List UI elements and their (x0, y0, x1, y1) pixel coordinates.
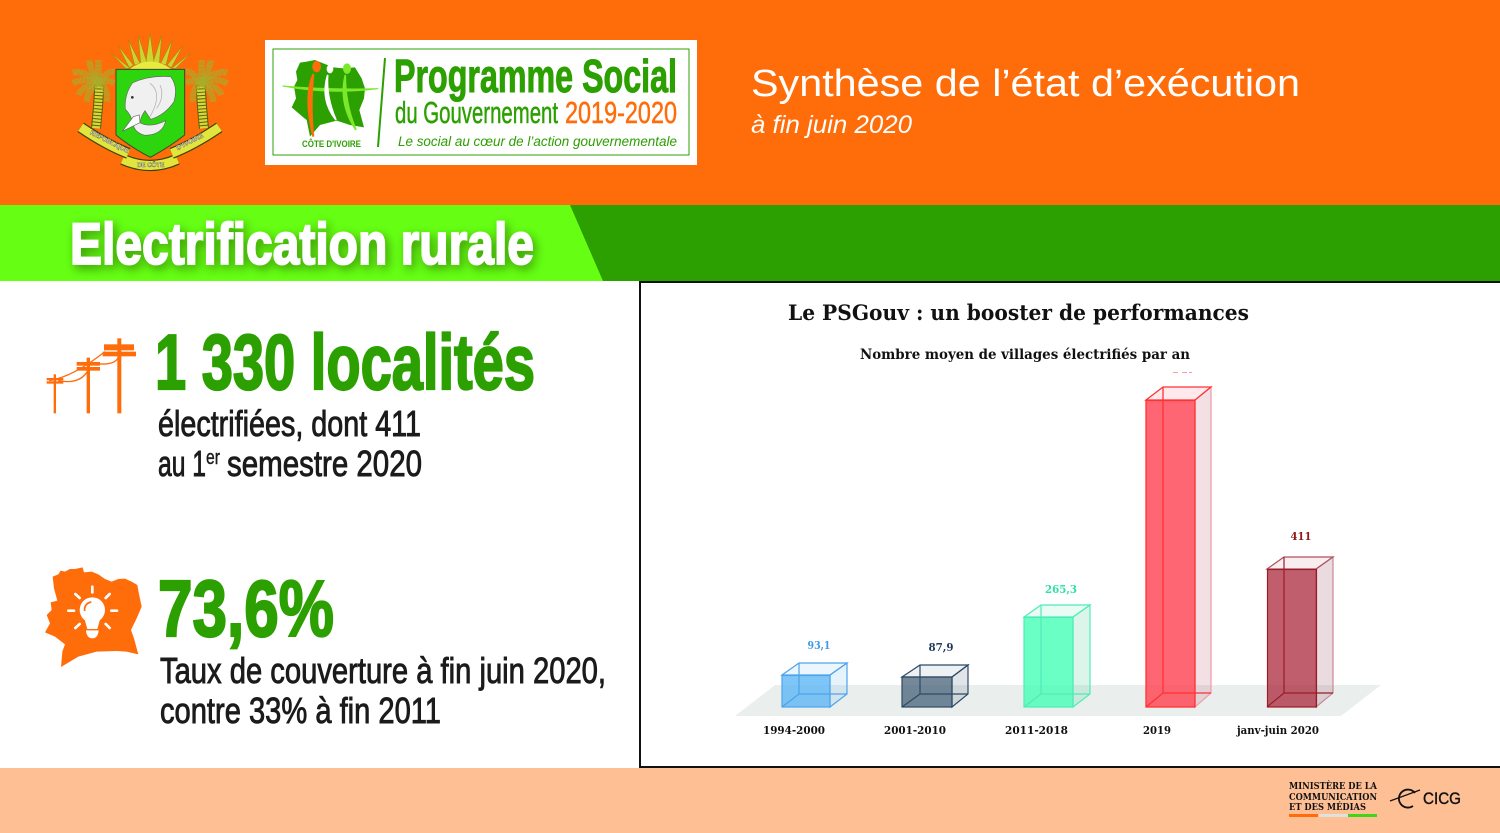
header subtitle: à fin juin 2020 (751, 111, 912, 139)
bar: 2019 (1146, 372, 1211, 707)
icon: map with light bulb (45, 567, 142, 667)
category labels: 2011-2018 (1005, 724, 1068, 737)
text: coverage detail line 2: contre 33% à fin 2011 (160, 690, 441, 731)
value: 93,1: 93,1 (808, 639, 830, 652)
header title: Synthèse de l’état d’exécution (751, 63, 1300, 105)
header band (0, 0, 1500, 205)
text: first semester: au 1 (158, 443, 206, 484)
ribbon inscriptions: D'IVOIRE (175, 132, 205, 152)
bar: janv-juin 2020 (1267, 530, 1333, 707)
CICG wordmark: CICG (1423, 789, 1461, 808)
flag stripe (1289, 814, 1377, 817)
text: first semester: semestre 2020 (227, 443, 422, 484)
ministry name: COMMUNICATION (1289, 792, 1377, 803)
icon: coat of arms (73, 33, 227, 169)
value: clipped label (1173, 372, 1192, 374)
panel: key figures (45, 318, 606, 731)
logo subtitle: du Gouvernement (395, 95, 558, 130)
logo caption: CÔTE D'IVOIRE (302, 138, 361, 149)
icon: logo map with figures (283, 60, 378, 137)
chart floor (735, 685, 1381, 716)
text: first semester (158, 443, 422, 484)
ribbon inscriptions (89, 128, 205, 169)
logo title: Programme Social (394, 50, 677, 102)
icon: shield (116, 69, 185, 157)
category labels (763, 724, 1319, 737)
icon: sun rays (111, 33, 191, 69)
category labels: 2001-2010 (884, 724, 946, 737)
stat: coverage rate: 73,6% (158, 564, 334, 653)
section title: Electrification rurale (70, 212, 534, 277)
bar: 1994-2000 (782, 639, 847, 707)
text: coverage detail line 1: Taux de couverture à fin juin 2020, (160, 650, 606, 691)
section banner (0, 205, 1500, 281)
category labels: janv-juin 2020 (1236, 724, 1319, 737)
chart subtitle: Nombre moyen de villages électrifiés par an (860, 347, 1190, 363)
ribbon inscriptions: DE CÔTE (137, 160, 165, 169)
ribbon inscriptions: RÉPUBLIQUE (89, 128, 131, 155)
logo tagline: Le social au cœur de l’action gouvernementale (398, 134, 677, 149)
icon: CICG logo mark (1390, 790, 1420, 808)
chart title: Le PSGouv : un booster de performances (788, 300, 1249, 325)
stat: localities: 1 330 localités (155, 318, 535, 406)
icon: elephant (122, 76, 176, 135)
ministry name: ET DES MÉDIAS (1289, 801, 1366, 813)
footer band (0, 768, 1500, 833)
text: localities detail: électrifiées, dont 411 (158, 403, 421, 444)
value: 265,3: 265,3 (1045, 583, 1077, 596)
value: 411: 411 (1290, 530, 1312, 543)
category labels: 1994-2000 (763, 724, 825, 737)
icon: ribbon (81, 127, 219, 165)
ministry name: MINISTÈRE DE LA (1289, 780, 1378, 792)
icon: power lines (47, 338, 136, 413)
logo divider (378, 58, 385, 147)
bar: 2001-2010 (902, 641, 968, 707)
text: first semester: er (206, 447, 220, 469)
value: 87,9: 87,9 (928, 641, 954, 654)
logo box (265, 40, 697, 165)
logo years: 2019-2020 (565, 95, 677, 130)
icon: left palm (73, 60, 114, 128)
icon: right palm (186, 60, 227, 128)
category labels: 2019 (1143, 724, 1171, 737)
bar: 2011-2018 (1024, 583, 1090, 707)
ministry name (1289, 780, 1378, 813)
panel: chart (640, 282, 1500, 767)
